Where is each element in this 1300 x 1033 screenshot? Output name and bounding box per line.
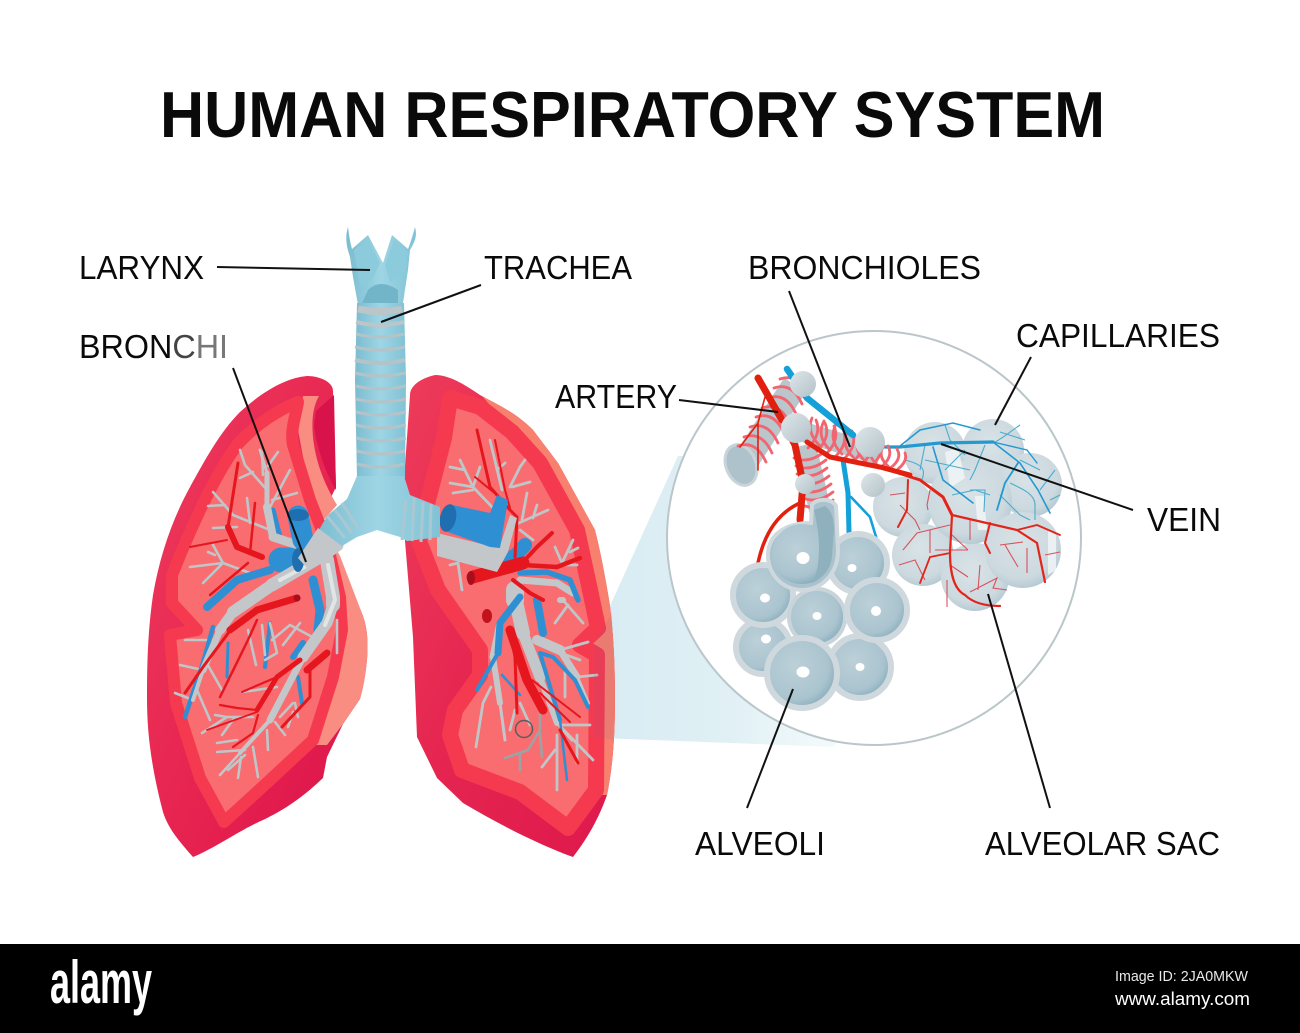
alveolus <box>829 636 891 698</box>
funnel overlay on lung <box>594 612 615 740</box>
right lung <box>403 375 615 857</box>
magnified alveolar sac <box>873 419 1062 611</box>
label: bronchioles: BRONCHIOLES <box>748 249 981 286</box>
left red vessel end <box>294 594 300 602</box>
footer url: www.alamy.com <box>1114 989 1250 1009</box>
footer logo: alamy <box>50 949 152 1016</box>
right lung outer shape <box>403 375 615 857</box>
tube <box>745 385 795 462</box>
leader lines <box>217 267 1133 808</box>
trachea tube <box>355 303 406 478</box>
right bronchus stem <box>437 515 517 572</box>
left lung <box>147 376 368 857</box>
label: trachea: TRACHEA <box>484 249 632 286</box>
alveolus <box>847 580 907 640</box>
alveolus <box>767 638 837 708</box>
trachea and larynx <box>298 227 440 568</box>
alveolus <box>789 589 845 645</box>
label: alveoli: ALVEOLI <box>695 825 825 862</box>
sac highlight <box>945 448 1056 575</box>
title: HUMAN RESPIRATORY SYSTEM <box>160 78 1105 151</box>
right lower red vessel <box>482 609 492 623</box>
left blue block end <box>292 548 304 572</box>
alveolus <box>829 534 887 592</box>
tube mouth <box>719 440 763 490</box>
left lung recess <box>314 395 336 490</box>
label: bronchi: BRONCHI <box>79 328 228 365</box>
left lung cut surface with rim <box>170 402 342 822</box>
left blue vessel end <box>287 509 309 521</box>
capillaries blue main <box>885 423 1050 513</box>
leader: vein <box>941 444 1133 510</box>
left lung outer shape <box>147 376 368 857</box>
leader: bronchioles <box>789 291 850 447</box>
leader: bronchi <box>233 368 306 562</box>
right red vessel end <box>467 571 475 585</box>
leader: trachea <box>381 285 481 322</box>
knobs <box>790 371 816 397</box>
left lung pink band <box>298 396 368 745</box>
small marker circle <box>516 720 532 738</box>
capillaries blue thin <box>905 425 1060 520</box>
footer image id: Image ID: 2JA0MKW <box>1115 968 1249 985</box>
magnified bronchiole tree <box>719 369 910 563</box>
trachea rings <box>355 309 406 467</box>
alveolus <box>736 620 790 674</box>
blue vessels <box>787 369 877 540</box>
left bronchi tree <box>175 450 337 778</box>
right lung pink edge <box>482 396 615 795</box>
footer band <box>0 944 1300 1033</box>
right blue vessel end <box>437 503 459 533</box>
larynx <box>346 227 416 305</box>
magnified circle <box>667 331 1081 745</box>
right blue vessel <box>445 495 508 548</box>
right bronchi tree <box>450 430 597 790</box>
bronchus rings <box>327 498 431 542</box>
alveolus with neck <box>768 500 838 590</box>
leader: alveoli <box>747 689 793 808</box>
capillaries red thin <box>890 490 1060 607</box>
leader: capillaries <box>995 357 1031 425</box>
left bronchus stem <box>298 528 342 568</box>
trachea fork <box>315 476 440 549</box>
larynx inner panels <box>354 240 380 285</box>
label: artery: ARTERY <box>555 378 677 415</box>
alveolus <box>733 565 793 625</box>
label: larynx: LARYNX <box>79 249 204 286</box>
red vessels <box>740 378 910 563</box>
funnel to magnified view <box>590 456 835 747</box>
leader: alveolar sac <box>988 594 1050 808</box>
sac lobes <box>873 419 1062 611</box>
label: alveolar sac: ALVEOLAR SAC <box>985 825 1220 862</box>
right lung cut surface with rim <box>419 398 598 828</box>
leader: artery <box>679 400 778 412</box>
magnified alveoli cluster <box>733 500 907 708</box>
label: capillaries: CAPILLARIES <box>1016 317 1220 354</box>
label: vein: VEIN <box>1147 501 1221 538</box>
leader: larynx <box>217 267 370 270</box>
pink coils <box>738 378 906 508</box>
capillaries red main <box>880 467 1060 606</box>
